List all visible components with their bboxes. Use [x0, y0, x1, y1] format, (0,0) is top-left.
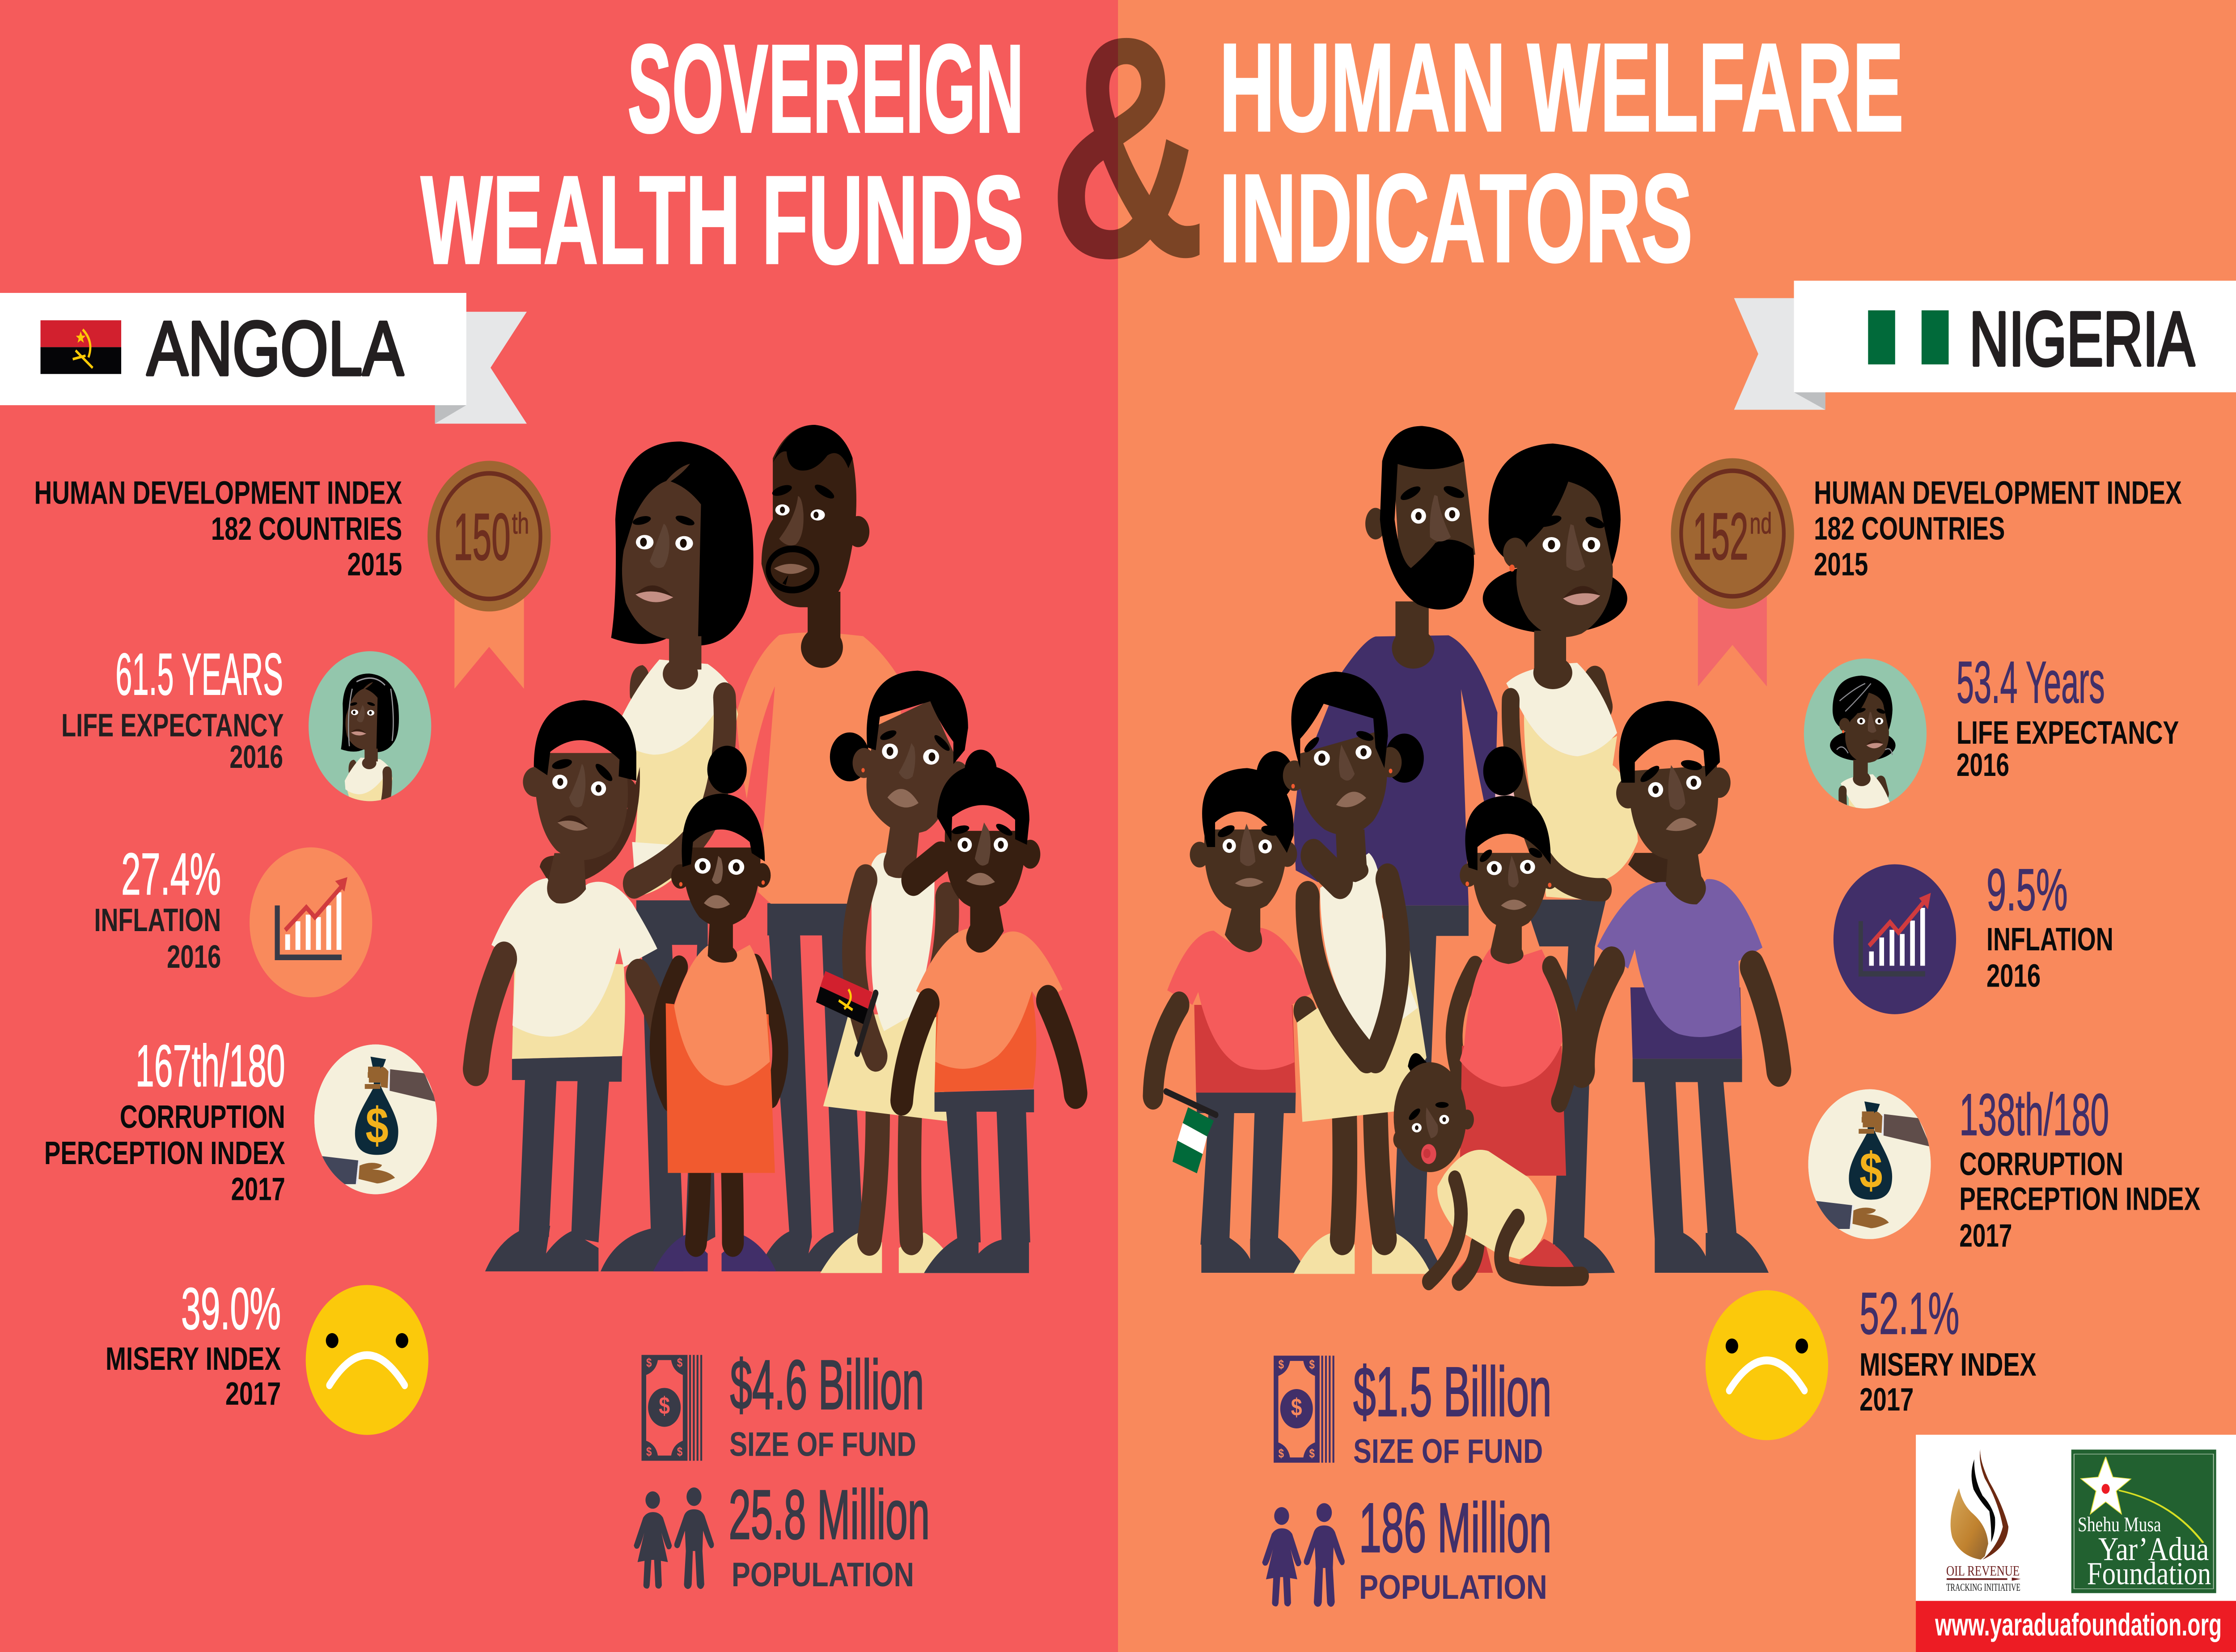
- Angola life expectancy text: 61.5 YEARS: [115, 641, 283, 707]
- medal: Nigeria 152nd: 152: [1693, 499, 1748, 573]
- icon: Nigeria sad face: [1706, 1290, 1828, 1440]
- medal: Nigeria 152nd: [1671, 458, 1794, 686]
- Nigeria corruption text: 138th/180: [1959, 1081, 2109, 1148]
- Angola family illustration: [476, 425, 1076, 1273]
- background: Nigeria side: [1118, 0, 2236, 1652]
- Angola HDI text: 182 COUNTRIES: [211, 510, 402, 546]
- title right lines: INDICATORS: [1219, 148, 1693, 288]
- ribbon: Angola: [0, 293, 527, 424]
- country name: Nigeria: NIGERIA: [1969, 296, 2195, 382]
- Nigeria life expectancy text: 2016: [1956, 746, 2009, 783]
- logo: Shehu Musa Yar'Adua Foundation: Foundation: [2087, 1556, 2211, 1592]
- flag: Angola: [41, 320, 121, 374]
- Nigeria fund icon: banknotes: [1274, 1355, 1334, 1463]
- Angola corruption text: 167th/180: [136, 1032, 285, 1099]
- Nigeria fund and population text: [1353, 1353, 1551, 1606]
- dollar signs on the Angola banknote: $: [677, 1356, 682, 1370]
- father: [1293, 426, 1615, 1274]
- Angola life expectancy text: 2016: [229, 738, 283, 775]
- dollar signs on the Nigeria banknote: [1279, 1358, 1315, 1461]
- Angola corruption text: 2017: [231, 1171, 285, 1207]
- ampersand: [1058, 38, 1199, 259]
- Nigeria inflation text: [1986, 856, 2113, 994]
- Angola fund and population text: SIZE OF FUND: [729, 1425, 916, 1463]
- Nigeria inflation text: 2016: [1986, 957, 2041, 994]
- dollar signs on the Angola banknote: [646, 1356, 682, 1459]
- Angola fund and population text: 25.8 Million: [728, 1476, 930, 1554]
- hand-held Angolan flag: [816, 971, 876, 1053]
- Angola misery text: MISERY INDEX: [106, 1341, 281, 1377]
- ribbon: Nigeria: [1734, 281, 2236, 410]
- Angola corruption text: [44, 1032, 285, 1207]
- logo: Shehu Musa Yar'Adua Foundation: Shehu Musa: [2078, 1513, 2161, 1536]
- dollar signs on the Nigeria banknote: $: [1309, 1358, 1315, 1372]
- Angola inflation text: 27.4%: [121, 841, 221, 907]
- medal: Angola 150th: [428, 461, 551, 689]
- older girl with Angolan flag: [816, 671, 969, 1273]
- logo: Oil Revenue Tracking Initiative: [1946, 1449, 2021, 1593]
- Nigeria life expectancy text: LIFE EXPECTANCY: [1956, 714, 2179, 750]
- mother: [611, 441, 754, 898]
- icon: Nigeria life expectancy woman: [1804, 658, 1927, 809]
- Angola life expectancy text: [61, 641, 284, 775]
- Nigeria HDI text: 182 COUNTRIES: [1814, 510, 2005, 546]
- Nigeria corruption text: [1959, 1081, 2200, 1254]
- icon: Angola people: [634, 1487, 714, 1589]
- father: [736, 425, 901, 1271]
- Nigeria corruption text: PERCEPTION INDEX: [1959, 1181, 2200, 1217]
- father's far trouser leg: [601, 900, 715, 1271]
- Nigeria HDI text: [1814, 474, 2182, 582]
- Nigeria inflation text: INFLATION: [1986, 921, 2113, 957]
- flag: Nigeria: [1868, 310, 1948, 364]
- dollar signs on the Nigeria banknote: $: [1279, 1447, 1284, 1461]
- logo: Oil Revenue Tracking Initiative: OIL REVENUE: [1946, 1564, 2020, 1579]
- dollar signs on the Angola banknote: $: [646, 1356, 652, 1370]
- medal: Angola 150th: th: [512, 507, 529, 540]
- Nigeria corruption text: CORRUPTION: [1959, 1146, 2123, 1182]
- icon: Nigeria corruption money bag: $: [1859, 1142, 1882, 1199]
- icon: Angola sad face: [306, 1285, 428, 1435]
- Angola misery text: 2017: [225, 1375, 281, 1411]
- title right lines: [1219, 18, 1904, 288]
- icon: Angola corruption money bag: [314, 1044, 437, 1195]
- icon: Angola corruption money bag: $: [365, 1097, 389, 1154]
- Angola corruption text: CORRUPTION: [120, 1098, 285, 1135]
- dollar signs on the Angola banknote: $: [646, 1445, 652, 1459]
- icon: Nigeria inflation chart: [1834, 864, 1956, 1014]
- Angola life expectancy text: LIFE EXPECTANCY: [61, 707, 284, 743]
- title right lines: HUMAN WELFARE: [1219, 18, 1904, 158]
- Angola inflation text: 2016: [167, 938, 221, 974]
- Angola misery text: [106, 1275, 281, 1411]
- title: [420, 38, 1901, 266]
- medal: Nigeria 152nd: nd: [1750, 507, 1772, 540]
- boy in cream shirt: [476, 700, 673, 1271]
- Nigeria misery text: MISERY INDEX: [1859, 1346, 2037, 1382]
- crawling baby: [1393, 1053, 1582, 1282]
- Angola HDI text: 2015: [347, 546, 402, 582]
- dollar signs on the Nigeria banknote: $: [1309, 1447, 1315, 1461]
- Nigeria inflation text: 9.5%: [1986, 856, 2068, 923]
- Angola fund and population text: POPULATION: [732, 1555, 914, 1593]
- Nigeria fund and population text: $1.5 Billion: [1353, 1353, 1551, 1431]
- country name: Angola: ANGOLA: [147, 306, 404, 391]
- Nigeria life expectancy text: [1956, 649, 2179, 783]
- website banner: [1916, 1601, 2236, 1652]
- icon: Nigeria corruption money bag: [1808, 1089, 1931, 1239]
- icon: Angola life expectancy woman: [309, 651, 431, 801]
- Nigeria corruption text: 2017: [1959, 1217, 2012, 1254]
- Angola inflation text: [94, 841, 221, 974]
- dollar signs on the Angola banknote: $: [677, 1445, 682, 1459]
- dollar signs on the Angola banknote: $: [659, 1392, 670, 1419]
- Angola fund and population text: $4.6 Billion: [730, 1346, 924, 1424]
- Nigeria fund and population text: 186 Million: [1359, 1489, 1551, 1567]
- girl in red shirt with Nigerian flag: [1153, 751, 1329, 1273]
- Nigeria life expectancy text: 53.4 Years: [1956, 649, 2105, 716]
- Nigeria misery text: [1859, 1280, 2037, 1417]
- title left lines: WEALTH FUNDS: [421, 150, 1024, 290]
- Angola HDI text: HUMAN DEVELOPMENT INDEX: [34, 474, 402, 511]
- logo: Shehu Musa Yar'Adua Foundation: Yar’Adua: [2098, 1531, 2209, 1567]
- Angola misery text: 39.0%: [181, 1275, 281, 1342]
- boy in purple shirt: [1581, 701, 1779, 1273]
- Angola inflation text: INFLATION: [94, 902, 221, 938]
- girl in red dress: [1454, 746, 1571, 1176]
- icon: Nigeria people: [1262, 1503, 1345, 1607]
- dollar signs on the Nigeria banknote: $: [1279, 1358, 1284, 1372]
- Angola corruption text: PERCEPTION INDEX: [44, 1135, 285, 1171]
- Nigeria HDI text: HUMAN DEVELOPMENT INDEX: [1814, 474, 2182, 511]
- background: Angola side: [0, 0, 1118, 1652]
- little girl in orange dress: [653, 746, 780, 1271]
- boy in orange shirt: [902, 750, 1076, 1273]
- icon: Angola inflation chart: [250, 847, 372, 997]
- Angola fund and population text: [728, 1346, 930, 1593]
- tall girl in cream dress: [1283, 672, 1431, 1274]
- Nigeria fund and population text: SIZE OF FUND: [1353, 1432, 1543, 1470]
- dollar signs on the Nigeria banknote: $: [1291, 1394, 1302, 1421]
- Nigeria HDI text: 2015: [1814, 546, 1868, 582]
- Angola HDI text: [34, 474, 402, 582]
- logo: Shehu Musa Yar'Adua Foundation: [2071, 1449, 2216, 1593]
- Nigeria misery text: 52.1%: [1859, 1280, 1959, 1347]
- title left lines: SOVEREIGN: [627, 19, 1024, 159]
- medal: Angola 150th: 150: [453, 500, 511, 574]
- logo: Oil Revenue Tracking Initiative: TRACKING INITIATIVE: [1946, 1581, 2020, 1593]
- Nigeria misery text: 2017: [1859, 1381, 1914, 1417]
- Angola fund icon: banknotes: [642, 1355, 702, 1461]
- Nigeria family illustration: [1153, 426, 1779, 1282]
- Nigeria fund and population text: POPULATION: [1359, 1568, 1547, 1606]
- logos panel: [1916, 1435, 2236, 1652]
- hand-held Nigerian flag: [1166, 1092, 1216, 1173]
- mother: [1483, 444, 1638, 1245]
- title left lines: [421, 19, 1024, 290]
